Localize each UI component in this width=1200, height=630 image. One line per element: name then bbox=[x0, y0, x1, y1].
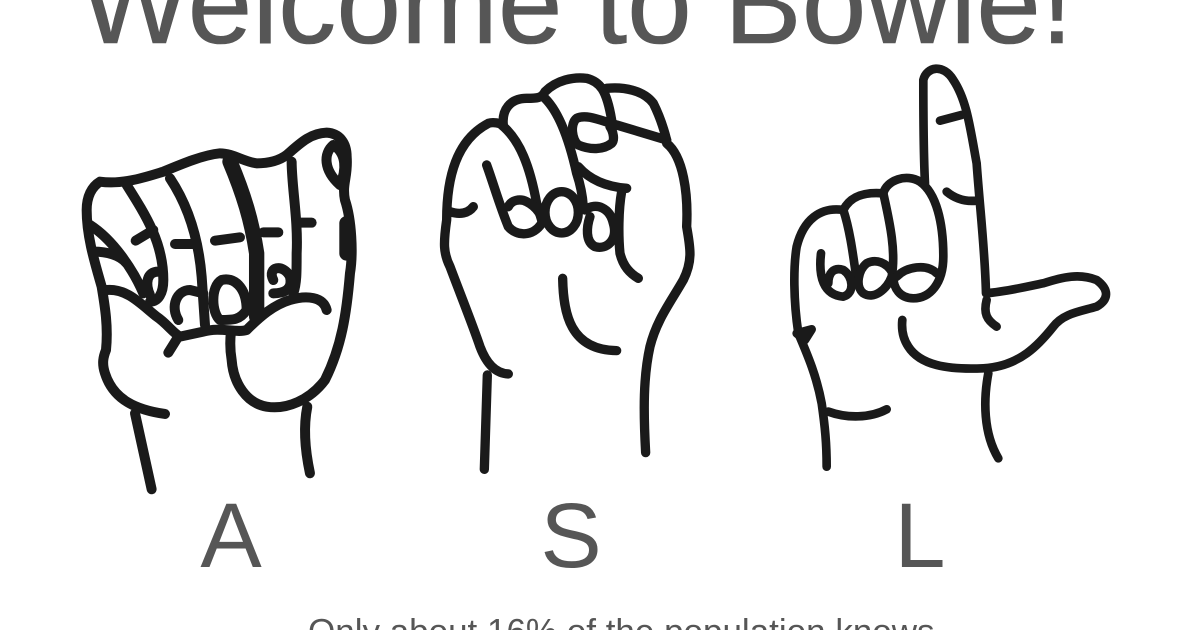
icon: hand sign S bbox=[444, 78, 690, 469]
icon: hand sign A bbox=[87, 133, 352, 489]
letter label S: S bbox=[540, 485, 602, 587]
letter label A: A bbox=[200, 485, 262, 587]
icon: hand sign L bbox=[794, 69, 1106, 467]
letter label L: L bbox=[894, 485, 946, 587]
